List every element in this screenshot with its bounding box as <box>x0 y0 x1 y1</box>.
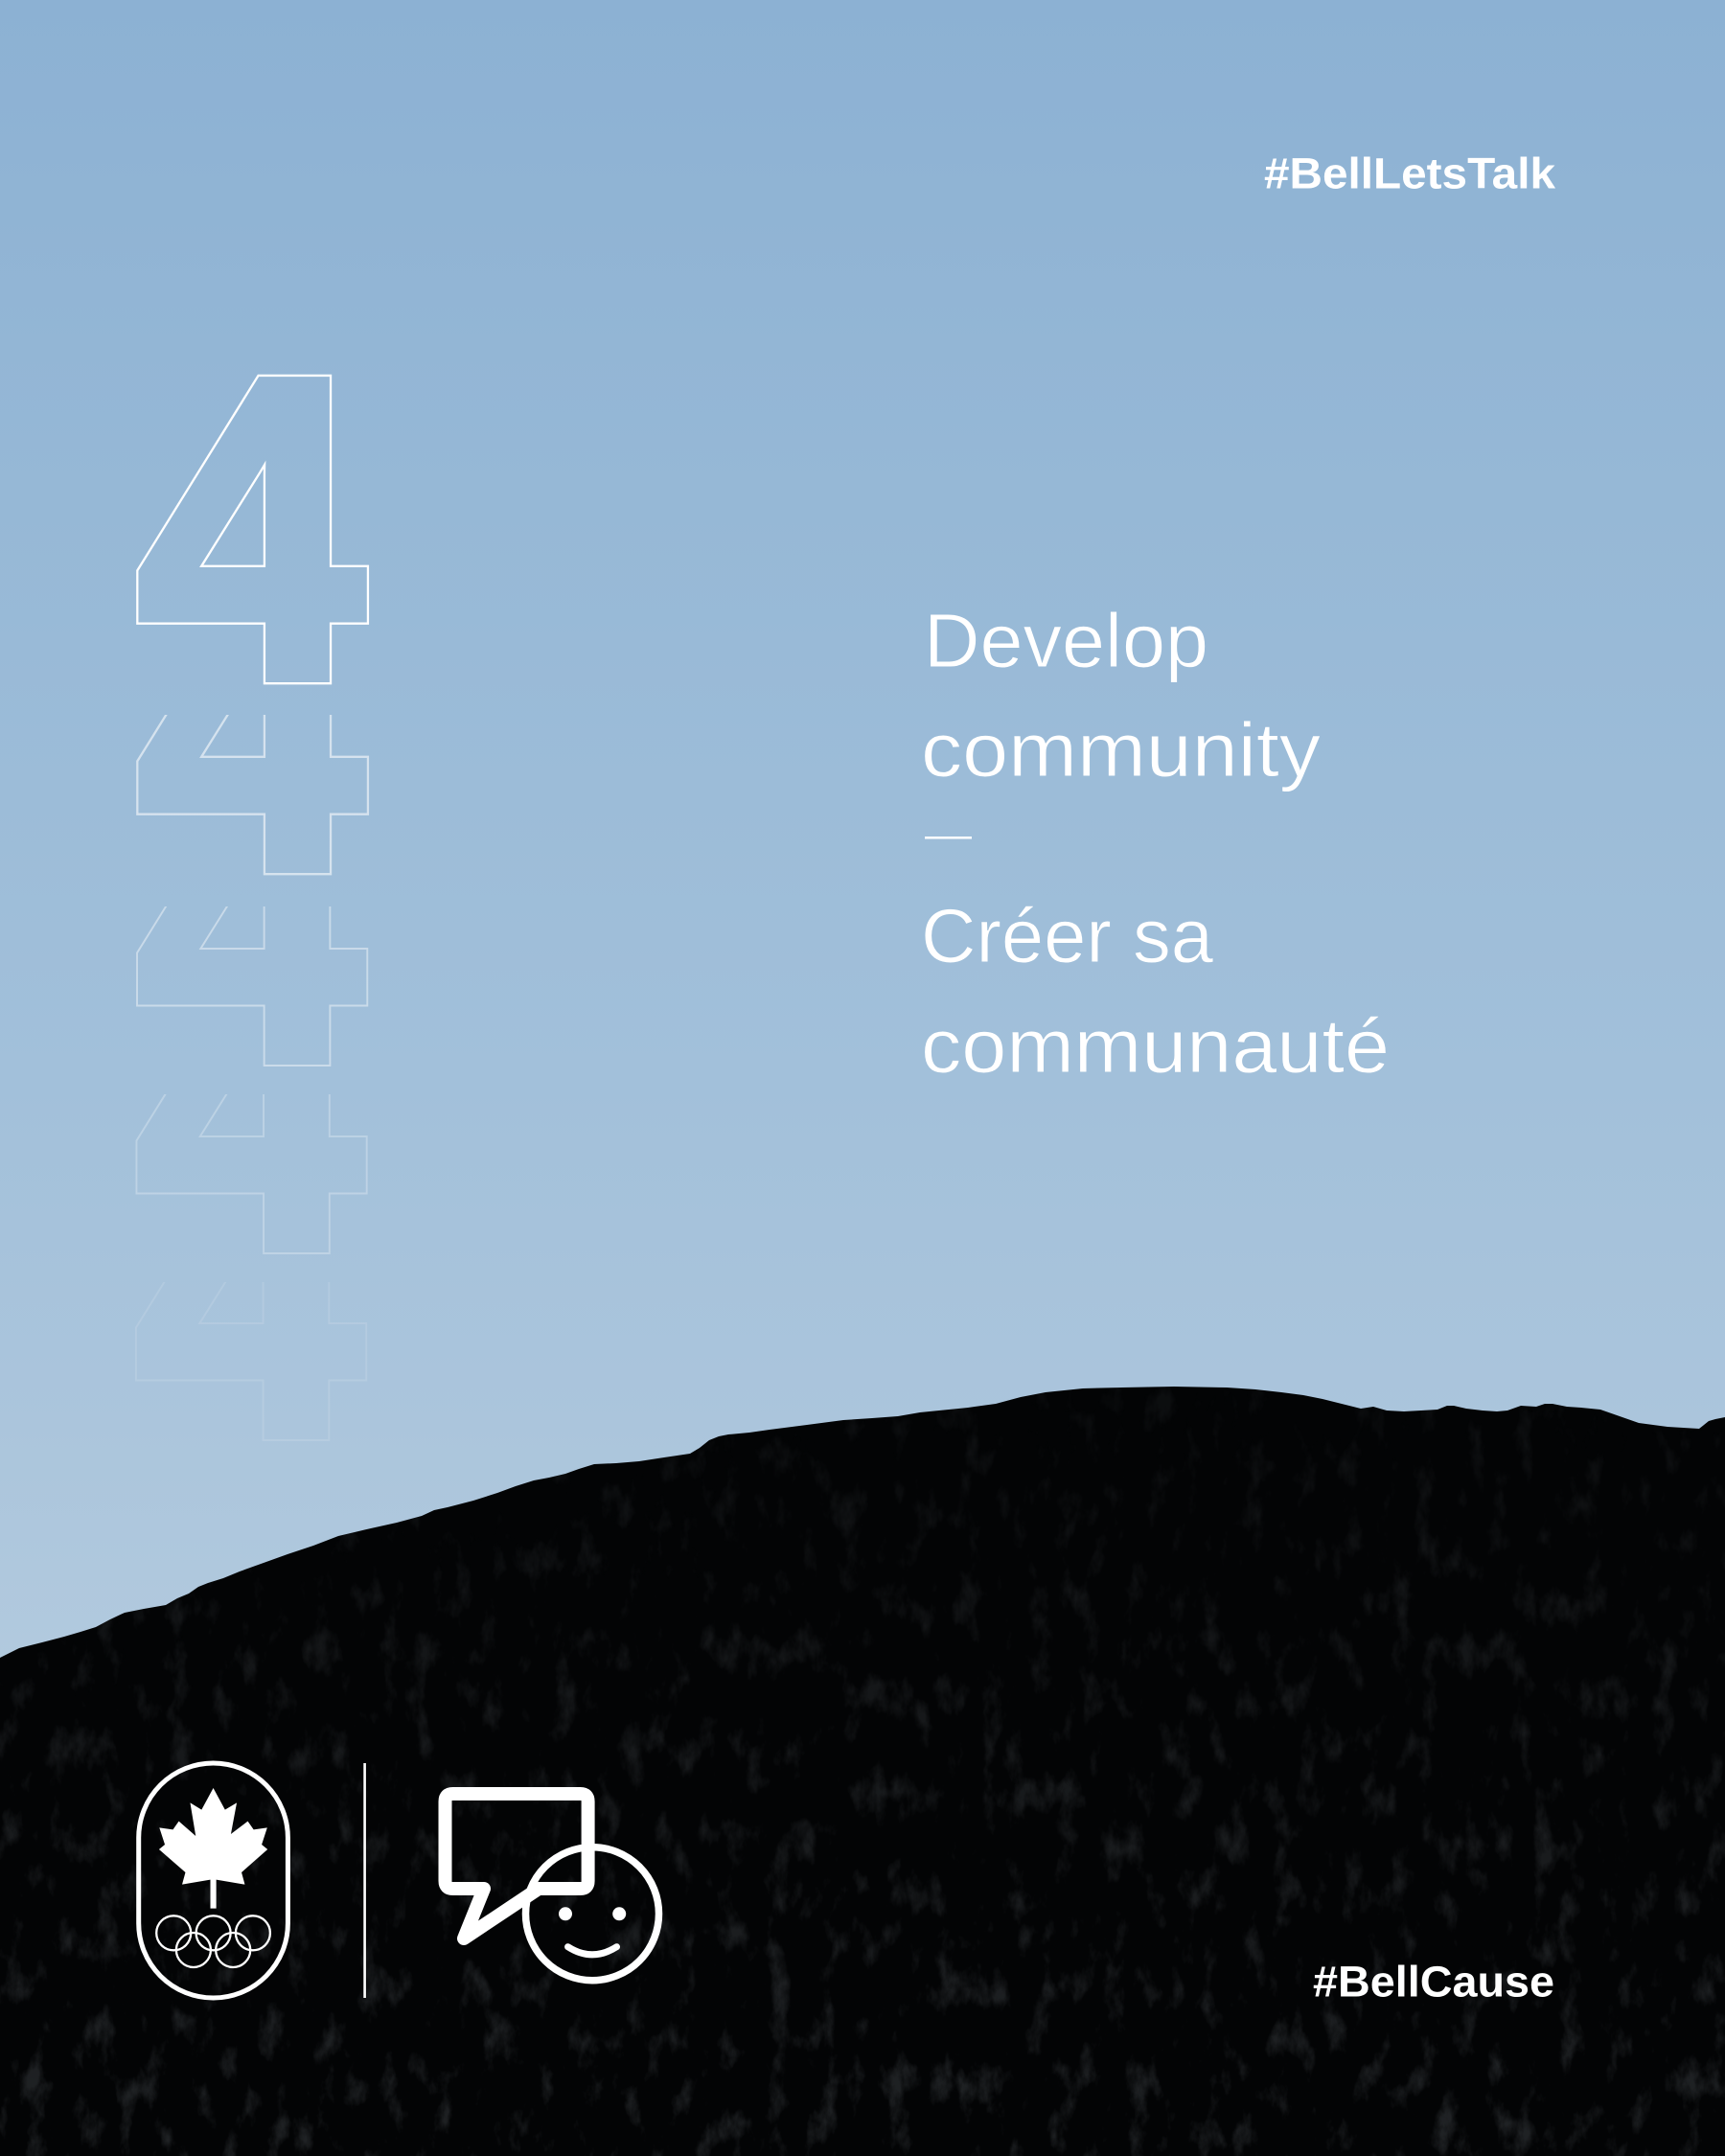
numeral: repeat 1: 4 <box>138 481 366 958</box>
numeral: repeat 3: 4 <box>137 860 365 1338</box>
badge outline <box>139 1763 288 1998</box>
icon: smiley face circle <box>525 1847 659 1981</box>
numeral 4 with fading repeats <box>135 374 370 1441</box>
heading: Créer sa: Créer sa <box>921 893 1213 978</box>
numeral: repeat 1 <box>136 715 369 876</box>
divider dash <box>925 837 972 839</box>
icon: maple leaf <box>159 1788 267 1909</box>
numeral: repeat 3: 4 <box>137 860 365 1338</box>
numeral: repeat 3 <box>136 1094 368 1254</box>
numeral: repeat 1: 4 <box>138 481 366 958</box>
numeral: repeat 2 <box>136 906 368 1067</box>
icon: right eye <box>612 1907 626 1920</box>
heading: communauté: communauté <box>921 1003 1390 1089</box>
icon: smile <box>568 1947 617 1955</box>
logo: Canadian Olympic Committee badge <box>139 1763 288 1998</box>
headline block: English and French titles <box>921 598 1390 1089</box>
numeral: repeat 4 <box>135 1282 367 1441</box>
logo: Bell Let's Talk speech bubble and smiley <box>445 1794 659 1981</box>
icon: olympic rings <box>156 1915 270 1967</box>
numeral: repeat 2: 4 <box>137 673 366 1150</box>
numeral: main outlined 4: 4 <box>138 290 366 768</box>
numeral: repeat 4: 4 <box>136 1047 365 1525</box>
hashtag: BellCause: #BellCause <box>1313 1957 1554 2007</box>
heading: Develop: Develop <box>924 598 1208 683</box>
icon: left eye <box>559 1907 572 1920</box>
background: dark mountain silhouette <box>0 1380 1725 2156</box>
hashtag: BellLetsTalk: #BellLetsTalk <box>1264 149 1556 197</box>
numeral: repeat 2: 4 <box>137 673 366 1150</box>
numeral: main outlined 4: 4 <box>138 290 366 768</box>
icon: speech bubble <box>445 1794 588 1938</box>
vertical divider between logos <box>363 1763 366 1998</box>
heading: community: community <box>921 707 1321 792</box>
numeral: repeat 4: 4 <box>136 1047 365 1525</box>
